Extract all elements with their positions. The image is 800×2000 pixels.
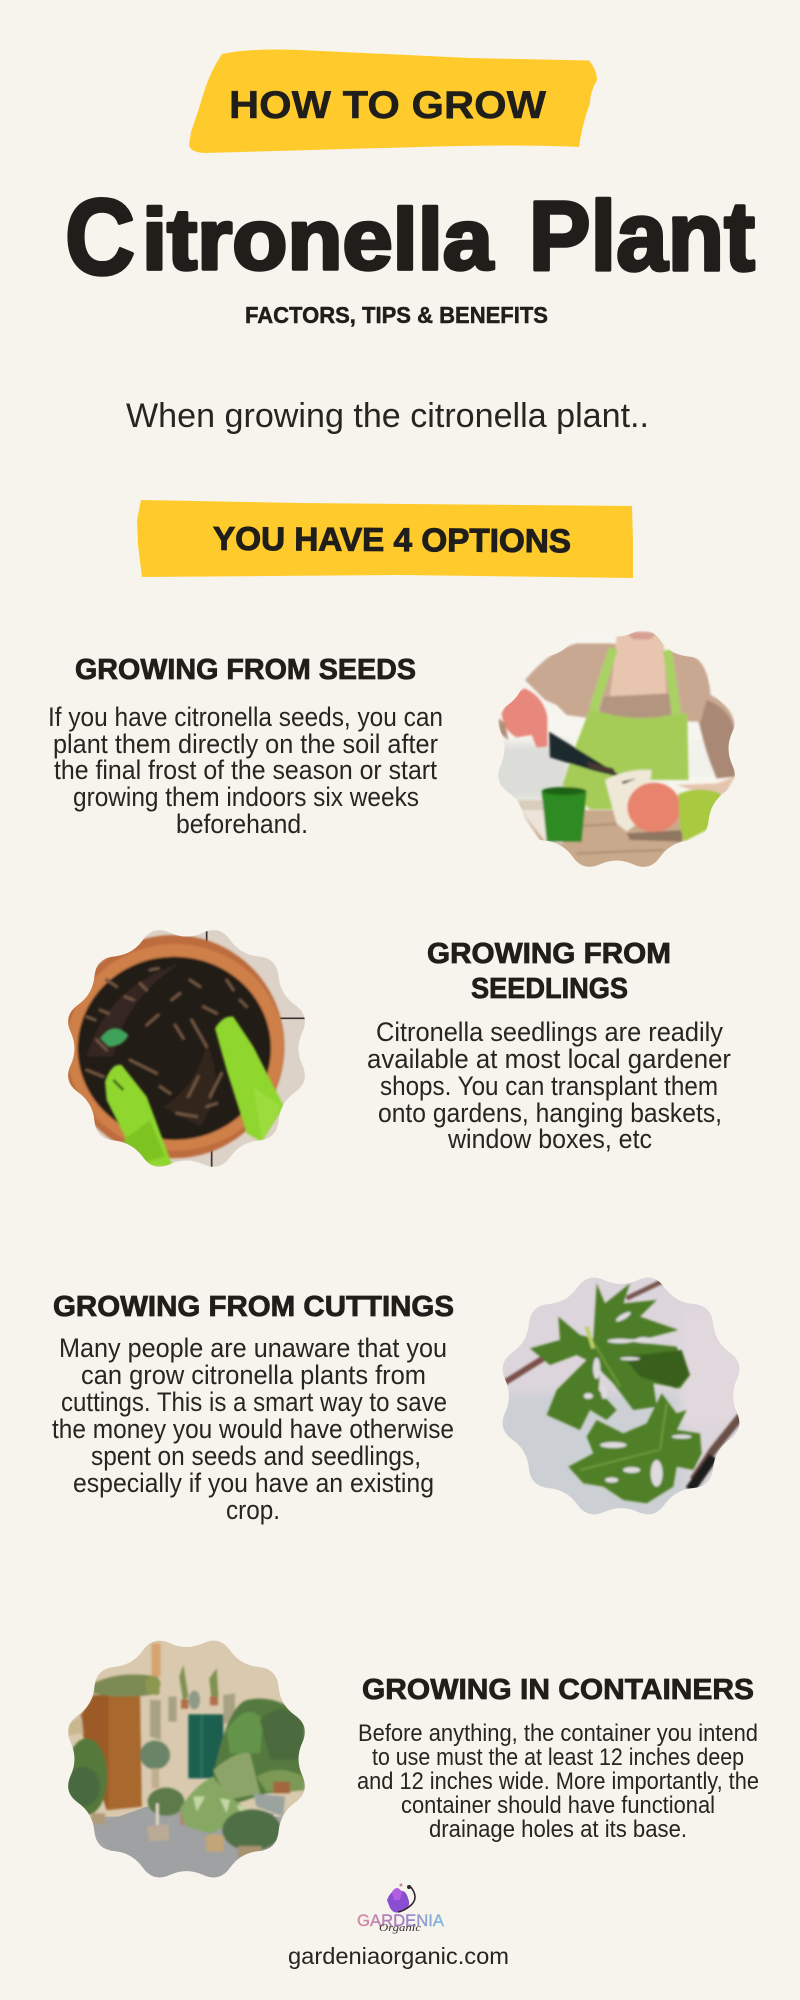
body: containers: drainage holes at its base. — [429, 1816, 687, 1843]
heading: growing from cuttings: GROWING FROM CUTTINGS — [53, 1291, 454, 1323]
body: containers: to use must the at least 12 inches deep — [372, 1744, 744, 1771]
banner: you have 4 options — [137, 500, 633, 578]
panel: growing from seeds text — [48, 654, 443, 839]
banner: how to grow — [189, 50, 597, 153]
body: containers — [357, 1720, 759, 1843]
body: seeds: the final frost of the season or start — [54, 755, 437, 785]
panel: growing in containers text — [357, 1674, 759, 1843]
banner: how to grow: HOW TO GROW — [229, 84, 546, 127]
body: cuttings: the money you would have otherwise — [52, 1414, 454, 1444]
heading: growing from seedlings: GROWING FROM — [427, 938, 671, 970]
photo: citronella leaves on boards — [502, 1278, 740, 1514]
body: cuttings: especially if you have an existing — [73, 1468, 434, 1498]
body: seeds: beforehand. — [176, 809, 308, 839]
panel: growing from seedlings text — [367, 938, 731, 1154]
body: cuttings: cuttings. This is a smart way to save — [61, 1387, 447, 1417]
body: cuttings — [52, 1333, 454, 1525]
logo: gardenia organic: GARDENIA — [357, 1911, 445, 1930]
body: seeds — [48, 702, 443, 839]
body: cuttings: Many people are unaware that you — [59, 1333, 447, 1363]
photo: gloved hands in soil pot — [68, 930, 305, 1167]
body: seedlings: onto gardens, hanging baskets, — [378, 1098, 722, 1128]
body: seedlings: shops. You can transplant them — [380, 1071, 718, 1101]
panel: growing from cuttings text — [52, 1291, 454, 1525]
title: Plant — [503, 181, 755, 291]
title: itronella — [142, 192, 494, 288]
body: containers: container should have functional — [401, 1792, 715, 1819]
icon: purple flower — [387, 1884, 415, 1913]
banner: you have 4 options: YOU HAVE 4 OPTIONS — [213, 520, 571, 559]
logo: gardenia organic: Organic — [379, 1922, 421, 1934]
body: seedlings: window boxes, etc — [447, 1124, 652, 1154]
body: seedlings — [367, 1017, 731, 1154]
heading: growing from seedlings — [427, 938, 671, 1005]
heading: growing from seeds: GROWING FROM SEEDS — [75, 654, 416, 686]
heading: growing from seedlings: SEEDLINGS — [471, 973, 628, 1005]
body: seeds: growing them indoors six weeks — [73, 782, 419, 812]
body: containers: and 12 inches wide. More importantly, the — [357, 1768, 759, 1795]
photo: gardener potting with trowel — [498, 630, 735, 867]
website url: gardeniaorganic.com — [288, 1943, 509, 1969]
heading: growing in containers: GROWING IN CONTAINERS — [362, 1674, 754, 1706]
body: cuttings: can grow citronella plants from — [81, 1360, 426, 1390]
photo: courtyard with potted plants — [68, 1640, 305, 1878]
intro line: When growing the citronella plant.. — [126, 397, 649, 435]
body: seeds: plant them directly on the soil after — [53, 729, 438, 759]
body: seeds: If you have citronella seeds, you can — [48, 702, 443, 732]
body: cuttings: spent on seeds and seedlings, — [91, 1441, 421, 1471]
body: containers: Before anything, the container you intend — [358, 1720, 758, 1747]
logo: gardenia organic — [357, 1884, 445, 1934]
title: C — [65, 176, 135, 297]
subtitle: FACTORS, TIPS & BENEFITS — [245, 302, 548, 328]
body: cuttings: crop. — [226, 1495, 280, 1525]
body: seedlings: Citronella seedlings are readily — [376, 1017, 723, 1047]
body: seedlings: available at most local gardener — [367, 1044, 731, 1074]
